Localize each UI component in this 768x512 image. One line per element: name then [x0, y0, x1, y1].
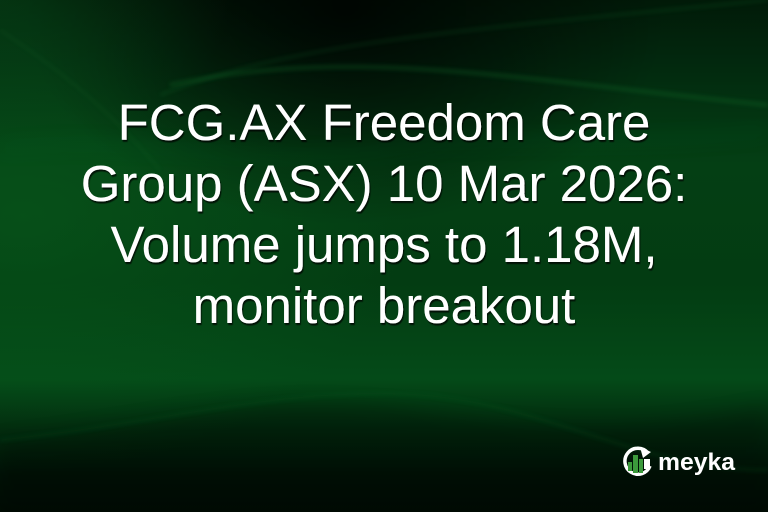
title: monitor breakout: [193, 277, 575, 334]
wordmark: meyka: [658, 449, 736, 476]
title: [81, 94, 687, 334]
title: Group (ASX) 10 Mar 2026:: [81, 155, 687, 212]
logo: meyka: [625, 447, 736, 476]
icon: ring with bars: [625, 447, 651, 474]
title: Volume jumps to 1.18M,: [110, 216, 658, 273]
title: FCG.AX Freedom Care: [118, 94, 650, 151]
